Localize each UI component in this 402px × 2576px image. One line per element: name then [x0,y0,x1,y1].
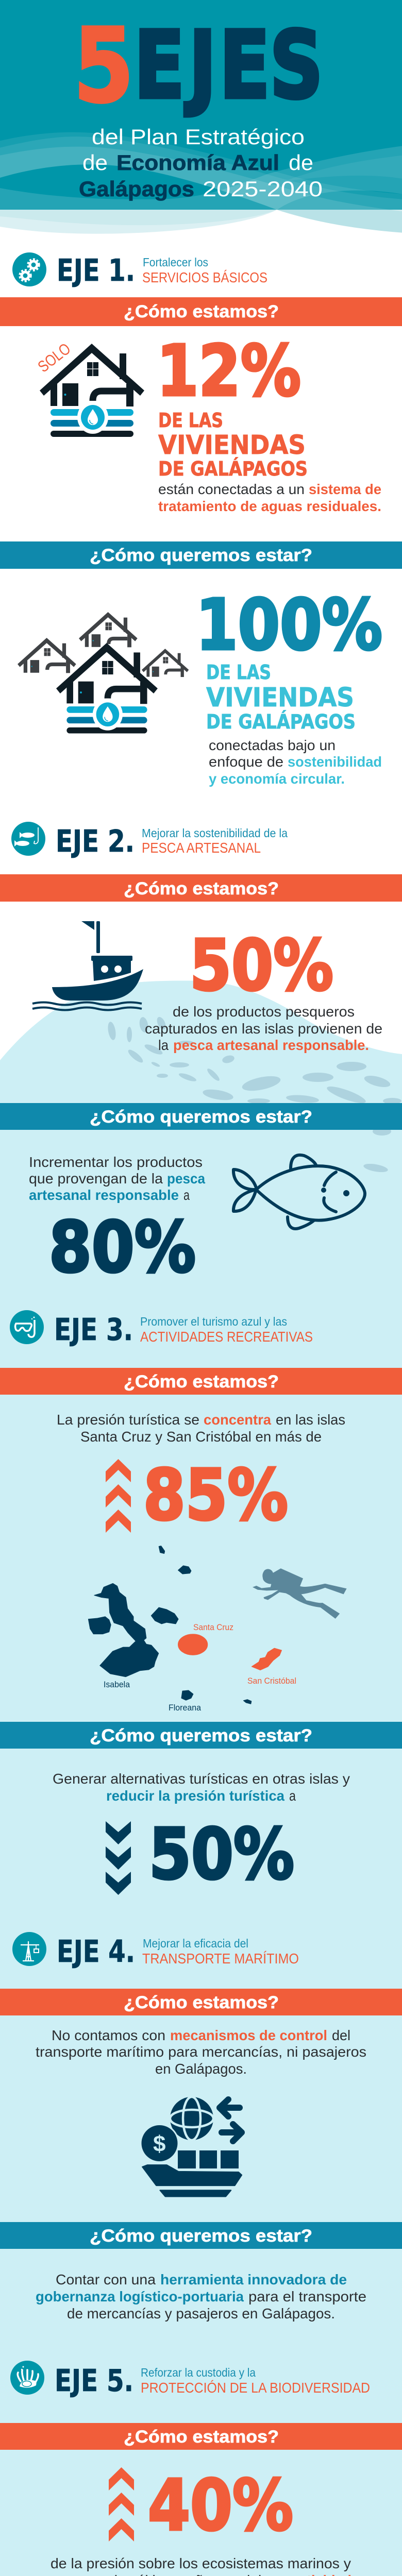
header panel [0,0,402,234]
stat: 80 percent: 80% [49,1207,196,1289]
text: presion turistica: Santa Cruz y San Cristóbal en más de [80,1429,322,1445]
icon: cargo ship with globe: $ [153,2131,165,2157]
eje 5 heading: Reforzar la custodia y la [141,2366,256,2379]
eje 4 heading [12,1932,299,1969]
band: como queremos 1 [0,541,402,569]
text: de las viviendas: DE GALÁPAGOS [158,457,308,480]
text: enfoque: enfoque de [209,754,283,770]
band: como estamos 2: ¿Cómo estamos? [124,879,279,899]
text: conectadas: sistema de [309,481,381,497]
stat: 12 percent: 12% [157,331,301,412]
text: generar alternativas: reducir la presión turística [106,1788,284,1804]
subtitle: Galápagos [79,177,194,201]
text: herramienta innovadora: para el transporte [248,2289,366,2304]
text: conectadas: están conectadas a un [158,481,305,497]
title: 5 EJES: J [185,12,216,120]
icon: snorkel mask [10,1310,44,1344]
band: como queremos 2 [0,1103,402,1130]
subtitle [79,125,323,201]
text: mecanismos de control [36,2027,366,2077]
icon: cargo ship with globe [140,2097,242,2196]
text: de las viviendas goal [206,661,356,733]
eje 4 heading: TRANSPORTE MARÍTIMO [142,1951,299,1967]
icon: coral and fish [10,2361,44,2395]
subtitle: del Plan Estratégico [92,125,305,149]
eje 5 heading: PROTECCIÓN DE LA BIODIVERSIDAD [141,2380,370,2396]
text: presion turistica [57,1412,345,1445]
eje 2 heading: EJE 2. [56,823,135,859]
text: mecanismos de control: mecanismos de control [170,2027,327,2043]
text: productos pesqueros: capturados en las islas provienen de [145,1021,382,1037]
subtitle: de [289,150,313,175]
icon: fish outline [233,1155,365,1229]
text: herramienta innovadora: gobernanza logístico-portuaria [36,2289,244,2304]
subtitle: de [82,150,108,175]
text: conectadas [158,481,381,514]
text: incrementar: pesca [167,1171,205,1187]
text: presion ecosistemas [35,2555,367,2576]
subtitle: Economía Azul [116,150,279,175]
arrows: up chevrons 2 [109,2467,134,2541]
text: incrementar: artesanal responsable [29,1187,179,1203]
eje 3 heading: EJE 3. [54,1312,133,1347]
text: enfoque: conectadas bajo un [209,737,336,753]
band: como estamos 5: ¿Cómo estamos? [124,2427,279,2447]
title: 5 EJES [73,6,323,126]
text: enfoque: sostenibilidad [288,754,382,770]
text: productos pesqueros: la [158,1037,169,1053]
icon: fishing boat [32,921,143,1010]
eje 2 heading [11,822,288,859]
icon: fish and hook [11,822,45,856]
band: como queremos 3 [0,1722,402,1749]
text: generar alternativas [53,1771,350,1804]
map labels [104,1622,296,1713]
band: como estamos 3: ¿Cómo estamos? [124,1372,279,1392]
band: como estamos 1 [0,297,402,326]
map labels: San Cristóbal [247,1676,296,1686]
text: conectadas: tratamiento de aguas residuales. [158,498,381,514]
eje 2 heading: PESCA ARTESANAL [142,840,261,856]
icon: port crane [12,1932,46,1966]
stat: 40 percent: 40% [148,2465,293,2547]
text: mecanismos de control: en Galápagos. [155,2061,247,2077]
band: como estamos 2 [0,874,402,902]
eje 3 heading [10,1310,313,1347]
icon: house with water pipes [40,344,144,437]
text: generar alternativas: Generar alternativas turísticas en otras islas y [53,1771,350,1787]
text: incrementar [29,1154,205,1203]
band: como queremos 1: ¿Cómo queremos estar? [90,546,312,565]
text: enfoque [209,737,382,787]
eje 1 heading: SERVICIOS BÁSICOS [142,269,267,285]
eje 3 heading: Promover el turismo azul y las [140,1315,287,1328]
band: como estamos 3 [0,1368,402,1395]
text: presion turistica: La presión turística se [57,1412,199,1428]
icon: group of houses [18,612,189,734]
band: como estamos 1: ¿Cómo estamos? [124,302,279,321]
text: herramienta innovadora: Contar con una [56,2272,156,2287]
map labels: Isabela [104,1680,130,1689]
text: productos pesqueros [145,1004,382,1053]
title: 5 EJES: S [270,12,323,120]
icon: scuba diver [253,1568,347,1619]
text: de las viviendas goal: VIVIENDAS [206,683,354,713]
map labels: Floreana [169,1703,201,1713]
title: 5 EJES: E [220,12,270,120]
band: como queremos 3: ¿Cómo queremos estar? [90,1726,312,1745]
eje 4 heading: EJE 4. [57,1934,135,1969]
text: productos pesqueros: de los productos pesqueros [173,1004,355,1020]
text: productos pesqueros: pesca artesanal responsable. [173,1037,369,1053]
map labels: Santa Cruz [193,1622,233,1632]
text: presion turistica: concentra [204,1412,271,1428]
text: incrementar: Incrementar los productos [29,1154,203,1170]
text: de las viviendas goal: DE LAS [206,661,271,684]
text: mecanismos de control: del [332,2027,350,2043]
text: generar alternativas: a [289,1788,296,1804]
band: como queremos 2: ¿Cómo queremos estar? [90,1107,312,1127]
eje 5 heading [10,2361,370,2398]
eje 1 heading [12,252,267,288]
eje 1 heading: EJE 1. [57,252,135,288]
text: incrementar: a [183,1187,190,1203]
eje 1 heading: Fortalecer los [143,256,208,269]
band: como estamos 4 [0,1989,402,2015]
eje 4 heading: Mejorar la eficacia del [143,1937,248,1950]
school of fish [107,1015,401,1174]
text: herramienta innovadora: de mercancías y pasajeros en Galápagos. [67,2306,335,2321]
band: como queremos 4 [0,2222,402,2249]
title: 5 EJES: 5 [73,6,134,126]
eje 2 heading: Mejorar la sostenibilidad de la [142,826,288,840]
text: presion turistica: en las islas [276,1412,345,1428]
stat: 50 percent goal: 50% [149,1814,294,1895]
text: de las viviendas: DE LAS [158,409,223,432]
arrows: up chevrons [106,1459,131,1533]
text: de las viviendas [158,409,308,480]
eje 5 heading: EJE 5. [55,2363,133,2398]
band: como estamos 5 [0,2423,402,2450]
arrows: down chevrons [106,1821,131,1895]
band: como estamos 4: ¿Cómo estamos? [124,1993,279,2012]
stat: 50 percent: 50% [190,925,333,1007]
map: galapagos islands [89,1546,281,1704]
text: mecanismos de control: transporte marítimo para mercancías, ni pasajeros [36,2044,366,2060]
text: herramienta innovadora: herramienta innovadora de [160,2272,347,2287]
title: 5 EJES: E [134,12,185,120]
text: de las viviendas: VIVIENDAS [158,430,306,461]
text: enfoque: y economía circular. [209,771,345,787]
band: como queremos 4: ¿Cómo queremos estar? [90,2226,312,2246]
text: incrementar: que provengan de la [29,1171,163,1187]
text: solo: SOLO [35,340,74,376]
hill background [0,981,402,2576]
eje 3 heading: ACTIVIDADES RECREATIVAS [140,1329,313,1345]
stat: 85 percent: 85% [143,1455,288,1536]
icon: gears [12,252,46,286]
text: herramienta innovadora [36,2272,366,2321]
text: mecanismos de control: No contamos con [52,2027,165,2043]
text: de las viviendas goal: DE GALÁPAGOS [206,710,356,733]
subtitle: 2025-2040 [203,177,323,201]
text: presion ecosistemas: de la presión sobre los ecosistemas marinos y [51,2555,351,2571]
